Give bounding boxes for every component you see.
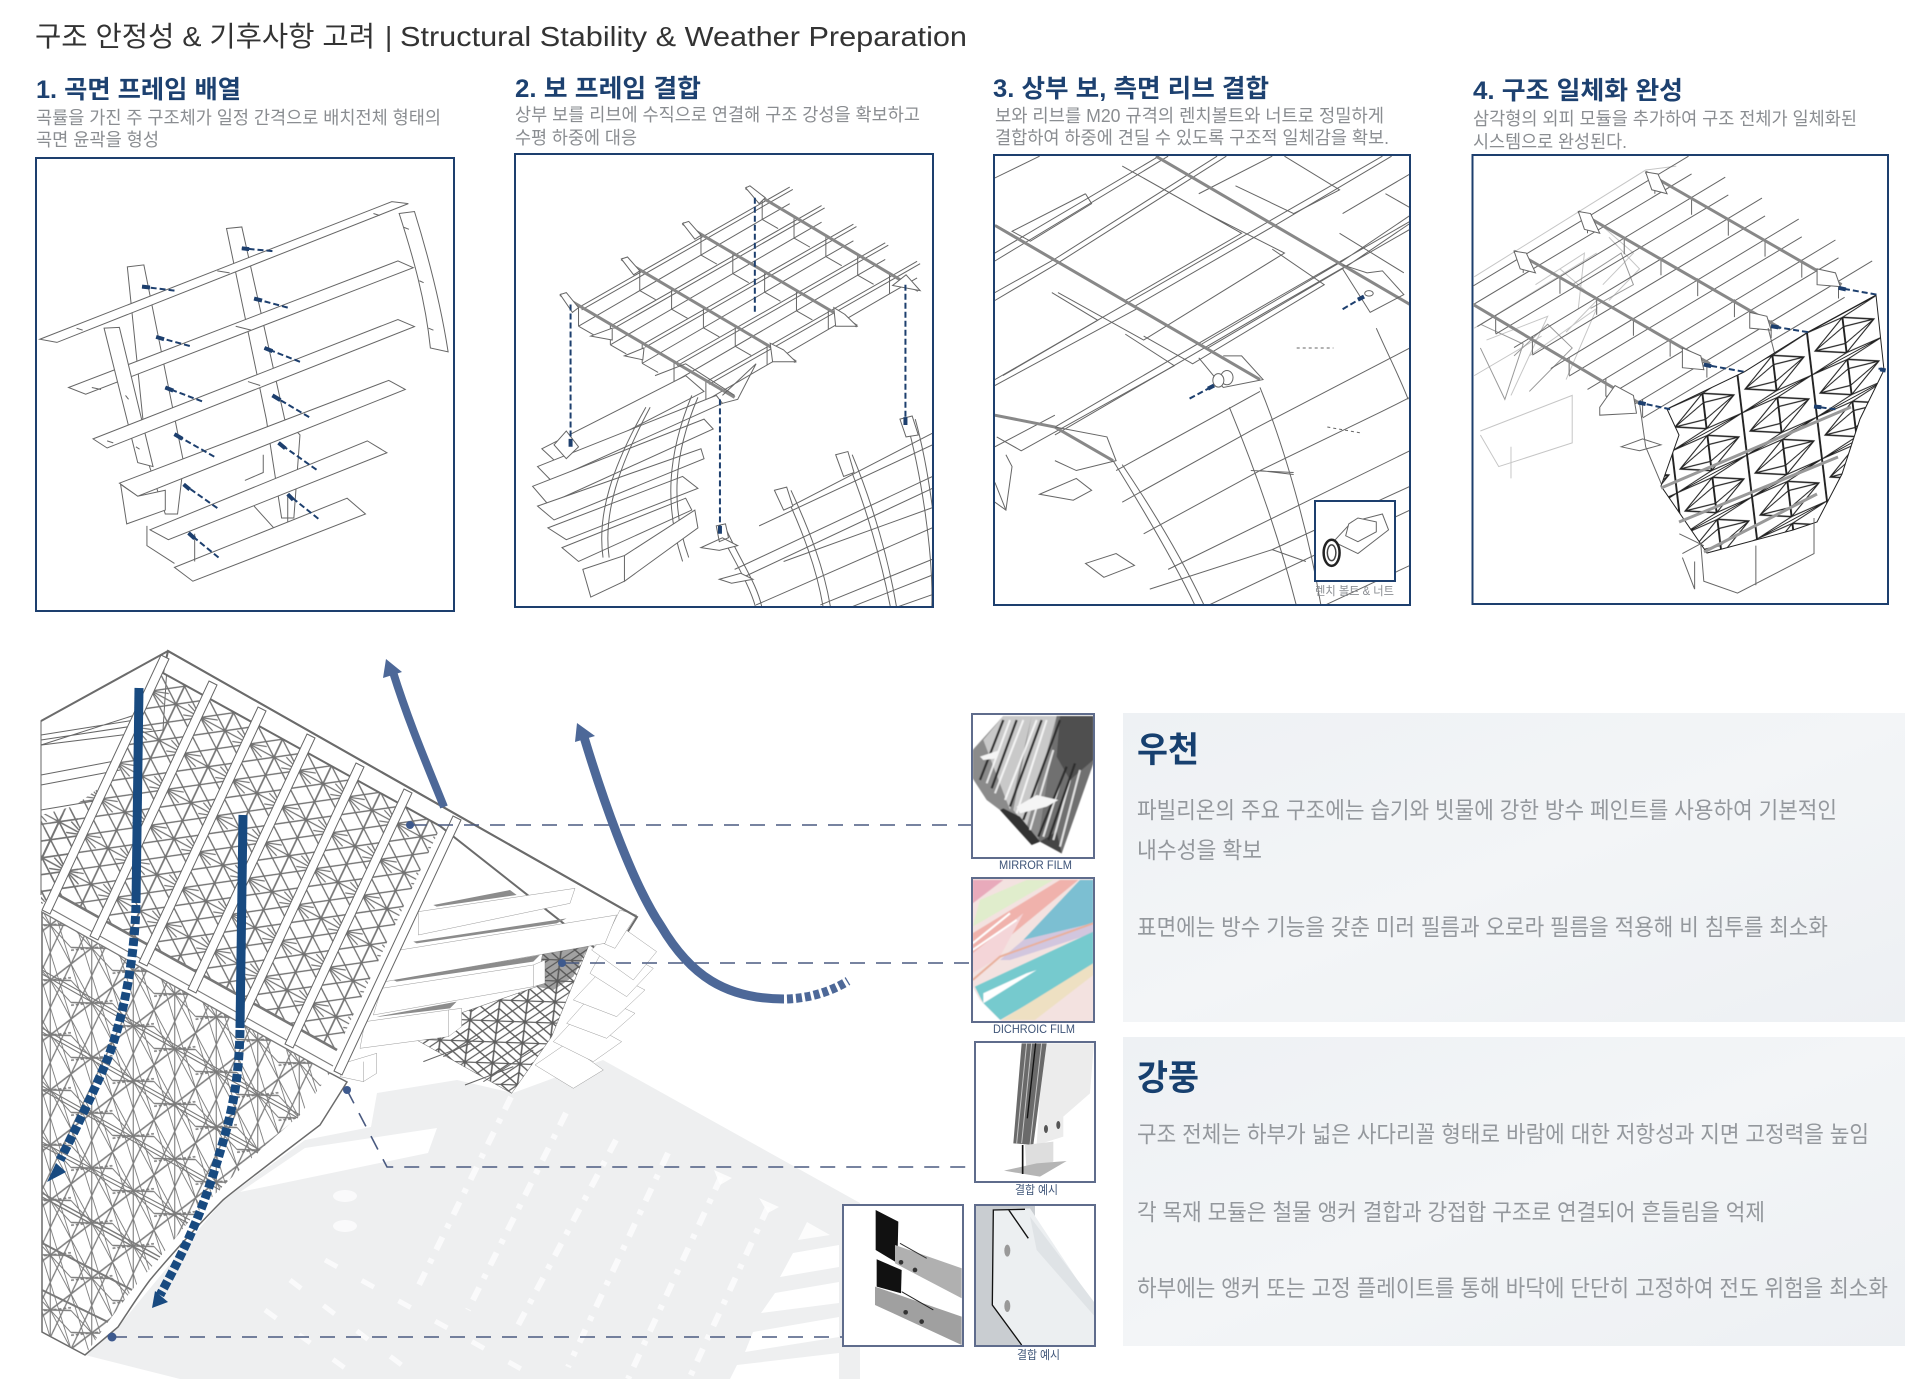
panel: step 4 integrated structure <box>1441 155 1888 604</box>
structure: top edge <box>163 651 637 960</box>
step 3 description <box>995 106 1389 148</box>
step 2 description <box>515 105 920 148</box>
panel: step 1 curved frame array <box>36 158 454 611</box>
heading: strong wind: 강풍 <box>1137 1059 1199 1098</box>
arrow: rain run-off right <box>152 815 243 1308</box>
panel: strong wind <box>1123 1037 1905 1346</box>
exploded frame drawing <box>40 202 448 581</box>
step 4 description: 삼각형의 외피 모듈을 추가하여 구조 전체가 일체화된 <box>1473 109 1857 129</box>
photo: joint example 3 <box>975 1205 1095 1346</box>
heading: rain: 우천 <box>1137 731 1199 770</box>
text: rain body <box>1137 797 1837 940</box>
panel: step 3 upper beam and rib joint <box>994 155 1410 607</box>
main axonometric structure <box>41 651 975 1355</box>
text: rain body: 파빌리온의 주요 구조에는 습기와 빗물에 강한 방수 페인트를 사용하여 기본적인 <box>1137 797 1837 823</box>
facade module lattice <box>1661 295 1884 553</box>
text: strong wind body: 각 목재 모듈은 철물 앵커 결합과 강접합 구조로 연결되어 흔들림을 억제 <box>1137 1199 1765 1225</box>
inset: wrench bolt and nut <box>1315 501 1395 581</box>
step 4 description: 시스템으로 완성된다. <box>1473 132 1627 152</box>
photo: joint example 1 <box>975 1042 1095 1182</box>
text: strong wind body: 구조 전체는 하부가 넓은 사다리꼴 형태로 바람에 대한 저항성과 지면 고정력을 높임 <box>1137 1121 1869 1147</box>
caption: mirror film: MIRROR FILM <box>999 858 1072 872</box>
step 1 heading: 1. 곡면 프레임 배열 <box>36 76 241 104</box>
structure: rear roof and left planks <box>41 651 168 900</box>
title: | <box>385 21 392 52</box>
arrow: wind up long <box>575 723 848 999</box>
step 3 heading: 3. 상부 보, 측면 리브 결합 <box>993 75 1269 103</box>
step 1 description <box>36 108 441 150</box>
step 1 description: 곡면 윤곽을 형성 <box>36 130 159 150</box>
arrow: rain run-off left <box>47 688 139 1182</box>
title: Structural Stability & Weather Preparation <box>400 21 967 52</box>
caption: joint example 3: 결합 예시 <box>1017 1348 1060 1362</box>
title: 구조 안정성 & 기후사항 고려 <box>35 21 375 52</box>
text: rain body: 표면에는 방수 기능을 갖춘 미러 필름과 오로라 필름을 적용해 비 침투를 최소화 <box>1137 914 1828 940</box>
structure: lower lattice <box>42 912 330 1355</box>
panel: shadow on ground <box>85 1060 860 1379</box>
structure: lower beams <box>42 893 337 1322</box>
step 4 heading: 4. 구조 일체화 완성 <box>1473 77 1683 105</box>
structure: rear beams, plates and arc lattice <box>340 888 657 1093</box>
step 3 description: 결합하여 하중에 견딜 수 있도록 구조적 일체감을 확보. <box>995 128 1389 148</box>
step 2 description: 수평 하중에 대응 <box>515 128 637 148</box>
text: strong wind body <box>1137 1121 1888 1301</box>
inset caption: 렌치 볼트 & 너트 <box>1315 584 1394 598</box>
step 3 description: 보와 리브를 M20 규격의 렌치볼트와 너트로 정밀하게 <box>995 106 1384 126</box>
structure: outer top line <box>41 651 637 917</box>
step 4 description <box>1473 109 1857 152</box>
integrated structure drawing <box>1441 156 1872 490</box>
leader lines <box>108 821 975 1342</box>
caption: dichroic film: DICHROIC FILM <box>993 1022 1075 1036</box>
bolted joint close-up drawing <box>995 156 1410 607</box>
caption: joint example 1: 결합 예시 <box>1015 1183 1058 1197</box>
step 2 description: 상부 보를 리브에 수직으로 연결해 구조 강성을 확보하고 <box>515 105 920 125</box>
photo: mirror film <box>972 714 1094 858</box>
beam grid drawing <box>533 186 940 617</box>
structure: lower lattice edge strip <box>42 912 347 1355</box>
panel: rain <box>1123 713 1905 1022</box>
structure: white band under dense lattice <box>42 893 337 1073</box>
text: rain body: 내수성을 확보 <box>1137 837 1262 863</box>
photo: joint example 2 <box>843 1205 963 1346</box>
structure: roof ribs <box>42 655 461 1075</box>
arrow: wind up short <box>383 659 444 807</box>
step 1 description: 곡률을 가진 주 구조체가 일정 간격으로 배치전체 형태의 <box>36 108 441 128</box>
structure: dense upper lattice <box>41 673 441 1050</box>
step 2 heading: 2. 보 프레임 결합 <box>515 75 701 103</box>
panel: step 2 beam frame joint <box>515 154 940 617</box>
title <box>35 21 967 52</box>
photo: dichroic film <box>972 878 1094 1022</box>
